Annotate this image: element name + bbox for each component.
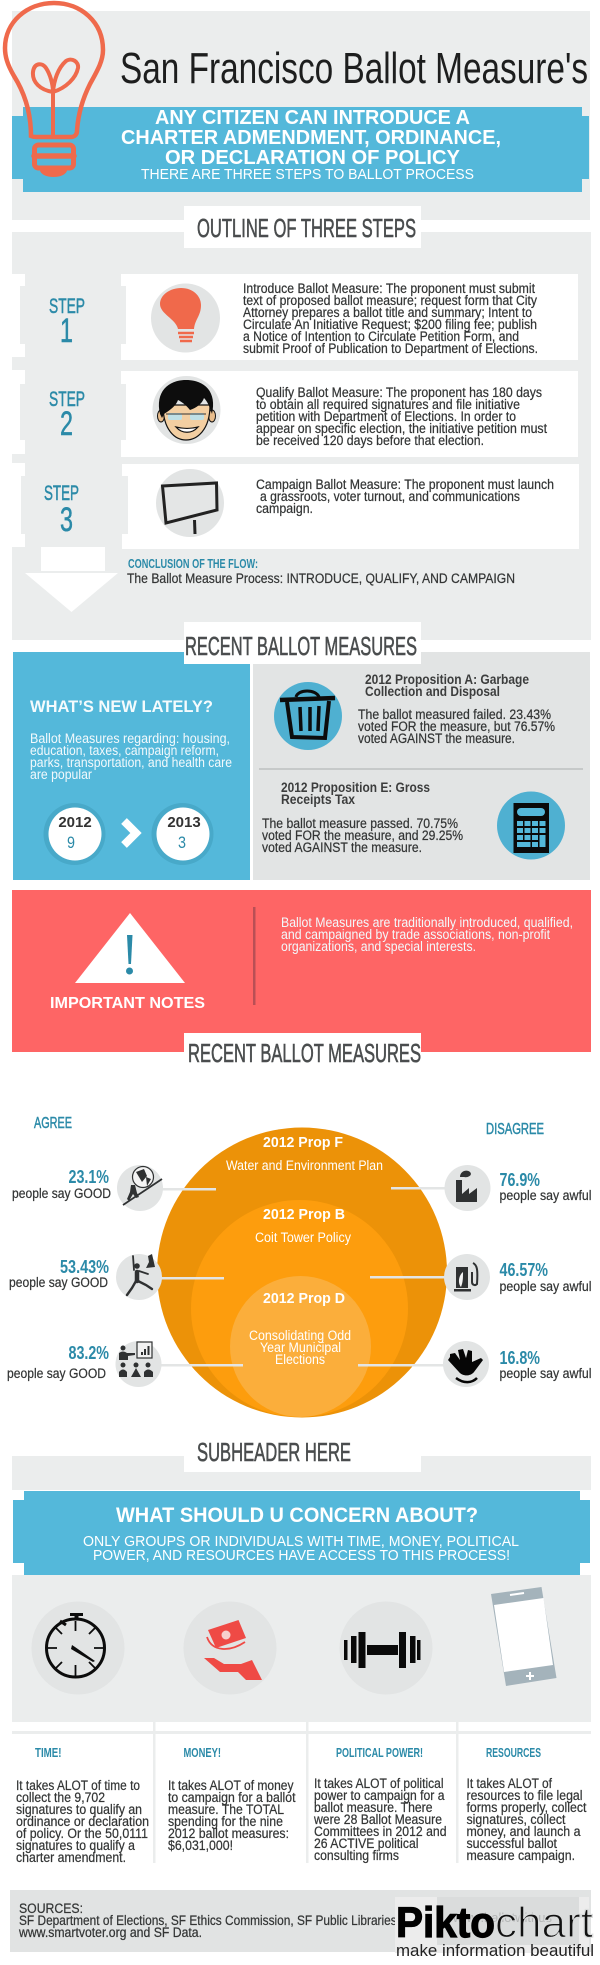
text: proposition E result: The ballot measure passed. 70.75%: [262, 816, 458, 831]
logo: Piktochart watermark: [395, 1897, 594, 1960]
step 2 text: [256, 385, 547, 448]
icon: large light bulb: [5, 3, 103, 177]
panel: header background: [12, 11, 590, 220]
step 1 text: Attorney prepares a ballot title and summary; Intent to: [243, 305, 532, 320]
chart labels: prop D: [249, 1290, 351, 1367]
icon: phone: [491, 1587, 556, 1686]
row: prop D agree: people say GOOD: [7, 1366, 106, 1381]
badge: 2012 count: 9: [67, 833, 75, 852]
banner: concern: [12, 1490, 591, 1575]
banner subtext: POWER, AND RESOURCES HAVE ACCESS TO THIS PROCESS!: [93, 1547, 510, 1564]
step 2 text: to obtain all required signatures and file initiative: [256, 397, 520, 412]
text: sources: [18, 1901, 400, 1940]
heading: proposition E: [281, 780, 430, 807]
column: money: MONEY!: [184, 1745, 221, 1760]
step 2 text: Qualify Ballot Measure: The proponent has 180 days: [256, 385, 542, 400]
icon: money in hand: [184, 1602, 276, 1694]
conclusion of the flow: The Ballot Measure Process: INTRODUCE, QUALIFY, AND CAMPAIGN: [127, 571, 515, 586]
banner headline: ANY CITIZEN CAN INTRODUCE A: [155, 107, 470, 129]
step 1 text: text of proposed ballot measure; request form that City: [243, 293, 537, 308]
column: political power: were 28 Ballot Measure: [313, 1812, 442, 1827]
text: proposition A result: The ballot measured failed. 23.43%: [358, 707, 551, 722]
column: time: TIME!: [35, 1745, 62, 1760]
step 1 text: submit Proof of Publication to Department of Elections.: [243, 341, 538, 356]
column: resources: resources to file legal: [466, 1788, 582, 1803]
badge: 2012 count: 2012: [58, 814, 92, 831]
text: sources: SOURCES:: [19, 1901, 83, 1916]
heading box: outline of three steps: [184, 206, 421, 248]
arrow: chevron: [124, 821, 136, 845]
column: political power: power to campaign for a: [314, 1788, 445, 1803]
icon: waving hand: [443, 1341, 489, 1387]
step 2 label: STEP: [49, 388, 85, 411]
icon: dancer: [116, 1254, 162, 1300]
column: time: charter amendment.: [16, 1850, 126, 1865]
step 1 text: a Notice of Intention to Circulate Petition Form, and: [243, 329, 519, 344]
column: political power: It takes ALOT of political: [314, 1776, 444, 1791]
chart labels: prop B: [255, 1206, 351, 1245]
step 3 label: [44, 482, 79, 539]
row: prop D agree: 83.2%: [68, 1343, 109, 1363]
step 2 card: [12, 370, 578, 457]
heading: proposition A: 2012 Proposition A: Garbage: [365, 672, 529, 687]
row: prop B agree: [9, 1254, 162, 1300]
column: resources: money, and launch a: [466, 1824, 581, 1839]
column: money: to campaign for a ballot: [168, 1790, 296, 1805]
column: time: ordinance or declaration: [16, 1814, 149, 1829]
step 3 text: Campaign Ballot Measure: The proponent must launch: [256, 477, 554, 492]
column: resources: successful ballot: [466, 1836, 557, 1851]
column: political power: consulting firms: [314, 1848, 399, 1863]
column: time: signatures to qualify a: [16, 1838, 135, 1853]
panel: important notes: [12, 890, 591, 1052]
row: prop F agree: 23.1%: [68, 1167, 109, 1187]
column: political power: POLITICAL POWER!: [336, 1745, 423, 1760]
logo: Piktochart watermark: Pikto: [396, 1899, 495, 1947]
icon: smiling face: [152, 376, 220, 444]
badge: 2012 count: [44, 803, 106, 865]
row: prop B agree: people say GOOD: [9, 1275, 108, 1290]
step 3 label: STEP: [44, 482, 79, 505]
chart labels: prop D: Year Municipal: [260, 1340, 341, 1355]
badge: 2013 count: 2013: [167, 814, 201, 831]
column: time: [16, 1745, 149, 1865]
conclusion of the flow: [127, 556, 515, 586]
heading: proposition E: 2012 Proposition E: Gross: [281, 780, 430, 795]
text: popular topics: are popular: [30, 767, 92, 782]
icon: dumbbell: [340, 1602, 432, 1694]
conclusion of the flow: CONCLUSION OF THE FLOW:: [128, 556, 258, 571]
heading box: subheader: [184, 1430, 421, 1472]
heading box: subheader: SUBHEADER HERE: [197, 1437, 351, 1467]
chart labels: prop F: [226, 1134, 383, 1173]
row: prop D disagree: 16.8%: [500, 1348, 540, 1368]
text: proposition E result: voted FOR the measure, and 29.25%: [262, 828, 463, 843]
heading box: recent ballot measures 2: [184, 1033, 421, 1075]
column: resources: RESOURCES: [486, 1745, 541, 1760]
text: proposition A result: [358, 707, 555, 746]
chart: nested circles: [157, 1128, 447, 1418]
step 2 label: [49, 388, 85, 443]
step 1 label: [49, 295, 85, 350]
step 1 label: STEP: [49, 295, 85, 318]
text: important notes: Ballot Measures are traditionally introduced, qualified,: [281, 915, 573, 930]
logo: Piktochart watermark: www.ballotwithus: [452, 1910, 552, 1925]
column: money: 2012 ballot measures:: [168, 1826, 289, 1841]
row: prop F disagree: [444, 1165, 592, 1211]
panel: sources: [10, 1890, 591, 1952]
row: prop F agree: people say GOOD: [12, 1186, 111, 1201]
chart labels: prop B: Coit Tower Policy: [255, 1230, 351, 1245]
text: important notes: and campaigned by trade associations, non-profit: [281, 927, 550, 942]
text: sources: www.smartvoter.org and SF Data.: [18, 1925, 202, 1940]
panel: what should you concern about: [12, 1430, 591, 1722]
row: prop F disagree: 76.9%: [500, 1170, 540, 1190]
banner headline: OR DECLARATION OF POLICY: [165, 147, 461, 169]
chart labels: prop F: Water and Environment Plan: [226, 1158, 383, 1173]
row: prop F disagree: people say awful: [500, 1188, 592, 1203]
text: popular topics: parks, transportation, and health care: [30, 755, 232, 770]
banner: intro: [12, 107, 589, 192]
column: money: $6,031,000!: [168, 1838, 233, 1853]
icon: globe climber: [117, 1165, 163, 1211]
heading: what's new lately: WHAT’S NEW LATELY?: [30, 697, 213, 716]
chart labels: prop D: Consolidating Odd: [249, 1328, 351, 1343]
arrow: flow down: [25, 547, 118, 612]
heading: proposition E: Receipts Tax: [281, 792, 355, 807]
heading: proposition A: Collection and Disposal: [365, 684, 500, 699]
row: prop D disagree: [443, 1341, 592, 1387]
step 3 text: campaign.: [256, 501, 313, 516]
logo: Piktochart watermark: chart: [495, 1899, 593, 1947]
column: money: It takes ALOT of money: [168, 1778, 294, 1793]
icon: presenter: [116, 1341, 162, 1387]
panel: four resources: [12, 1722, 591, 1865]
row: prop F agree: [12, 1165, 163, 1211]
logo: Piktochart watermark: make information beautiful: [396, 1941, 594, 1960]
column: money: [168, 1745, 296, 1853]
column: political power: 26 ACTIVE political: [314, 1836, 418, 1851]
column: resources: signatures, collect: [466, 1812, 566, 1827]
panel: what's new lately: [13, 652, 250, 880]
text: popular topics: Ballot Measures regarding: housing,: [30, 731, 230, 746]
banner subtext: [83, 1533, 519, 1564]
step 2 text: be received 120 days before that election.: [256, 433, 484, 448]
chart labels: prop B: 2012 Prop B: [263, 1206, 345, 1223]
step 3 text: [256, 477, 554, 516]
banner headline: [121, 107, 501, 169]
chart labels: prop D: 2012 Prop D: [263, 1290, 345, 1307]
step 3 card: [12, 463, 579, 549]
banner headline: CHARTER ADMENDMENT, ORDINANCE,: [121, 127, 501, 149]
heading box: recent ballot measures 2: RECENT BALLOT MEASURES: [188, 1038, 421, 1068]
step 1 label: 1: [60, 312, 73, 350]
row: prop B agree: 53.43%: [60, 1257, 109, 1277]
icon: calculator: [497, 792, 565, 860]
banner subtext: ONLY GROUPS OR INDIVIDUALS WITH TIME, MONEY, POLITICAL: [83, 1533, 519, 1550]
icon: orange bulb: [151, 284, 220, 352]
column: resources: measure campaign.: [466, 1848, 575, 1863]
text: proposition E result: voted AGAINST the measure.: [262, 840, 422, 855]
row: prop B disagree: people say awful: [500, 1279, 592, 1294]
icon: factory: [444, 1165, 490, 1211]
step 1 text: Circulate An Initiative Request; $200 filing fee; publish: [243, 317, 537, 332]
step 2 text: appear on specific election, the initiative petition must: [256, 421, 547, 436]
text: popular topics: education, taxes, campaign reform,: [30, 743, 219, 758]
column: time: of policy. Or the 50,0111: [16, 1826, 148, 1841]
step 1 text: [243, 281, 538, 356]
heading: important notes: IMPORTANT NOTES: [50, 995, 205, 1012]
text: proposition E result: [262, 816, 463, 855]
heading box: recent ballot measures: RECENT BALLOT MEASURES: [185, 631, 417, 661]
column: time: It takes ALOT of time to: [16, 1778, 140, 1793]
panel: propositions A and E: [253, 652, 590, 880]
column: money: measure. The TOTAL: [168, 1802, 284, 1817]
text: important notes: organizations, and special interests.: [281, 939, 476, 954]
text: proposition A result: voted AGAINST the measure.: [358, 731, 515, 746]
step 1 card: [12, 274, 578, 360]
label: disagree: DISAGREE: [486, 1121, 544, 1138]
column: resources: It takes ALOT of: [466, 1776, 552, 1791]
column: political power: ballot measure. There: [314, 1800, 432, 1815]
icon: trash can: [274, 682, 342, 750]
column: money: spending for the nine: [168, 1814, 283, 1829]
column: political power: Committees in 2012 and: [314, 1824, 446, 1839]
heading box: recent ballot measures: [184, 622, 421, 664]
text: important notes: [281, 915, 573, 954]
heading: proposition A: [365, 672, 529, 699]
icon: stopwatch: [32, 1602, 124, 1694]
chart labels: prop D: Elections: [275, 1352, 325, 1367]
label: agree: AGREE: [34, 1115, 72, 1132]
row: prop B disagree: [444, 1254, 592, 1300]
step 3 label: 3: [60, 501, 73, 539]
icon: warning triangle: [75, 913, 185, 983]
row: prop B disagree: 46.57%: [500, 1260, 548, 1280]
column: time: signatures to qualify an: [16, 1802, 142, 1817]
icon: fuel pump: [444, 1254, 490, 1300]
banner subline: THERE ARE THREE STEPS TO BALLOT PROCESS: [141, 167, 474, 183]
step 1 text: Introduce Ballot Measure: The proponent must submit: [243, 281, 535, 296]
column: resources: forms properly, collect: [466, 1800, 587, 1815]
text: popular topics: [30, 731, 232, 782]
chart labels: prop F: 2012 Prop F: [263, 1134, 343, 1151]
text: sources: SF Department of Elections, SF Ethics Commission, SF Public Libraries,: [19, 1913, 400, 1928]
row: prop D agree: [7, 1341, 162, 1387]
column: resources: [466, 1745, 587, 1863]
step 3 text: a grassroots, voter turnout, and communications: [260, 489, 520, 504]
row: prop D disagree: people say awful: [500, 1366, 592, 1381]
text: proposition A result: voted FOR the measure, but 76.57%: [358, 719, 555, 734]
column: political power: [313, 1745, 446, 1863]
icon: campaign sign: [156, 469, 224, 537]
banner headline: WHAT SHOULD U CONCERN ABOUT?: [116, 1504, 478, 1527]
step 2 text: petition with Department of Elections. In order to: [256, 409, 516, 424]
badge: 2013 count: 3: [178, 833, 186, 852]
panel: outline of three steps: [12, 206, 591, 640]
step 2 label: 2: [60, 405, 73, 443]
column: time: collect the 9,702: [16, 1790, 105, 1805]
badge: 2013 count: [152, 803, 214, 865]
heading box: outline of three steps: OUTLINE OF THREE STEPS: [197, 213, 416, 243]
